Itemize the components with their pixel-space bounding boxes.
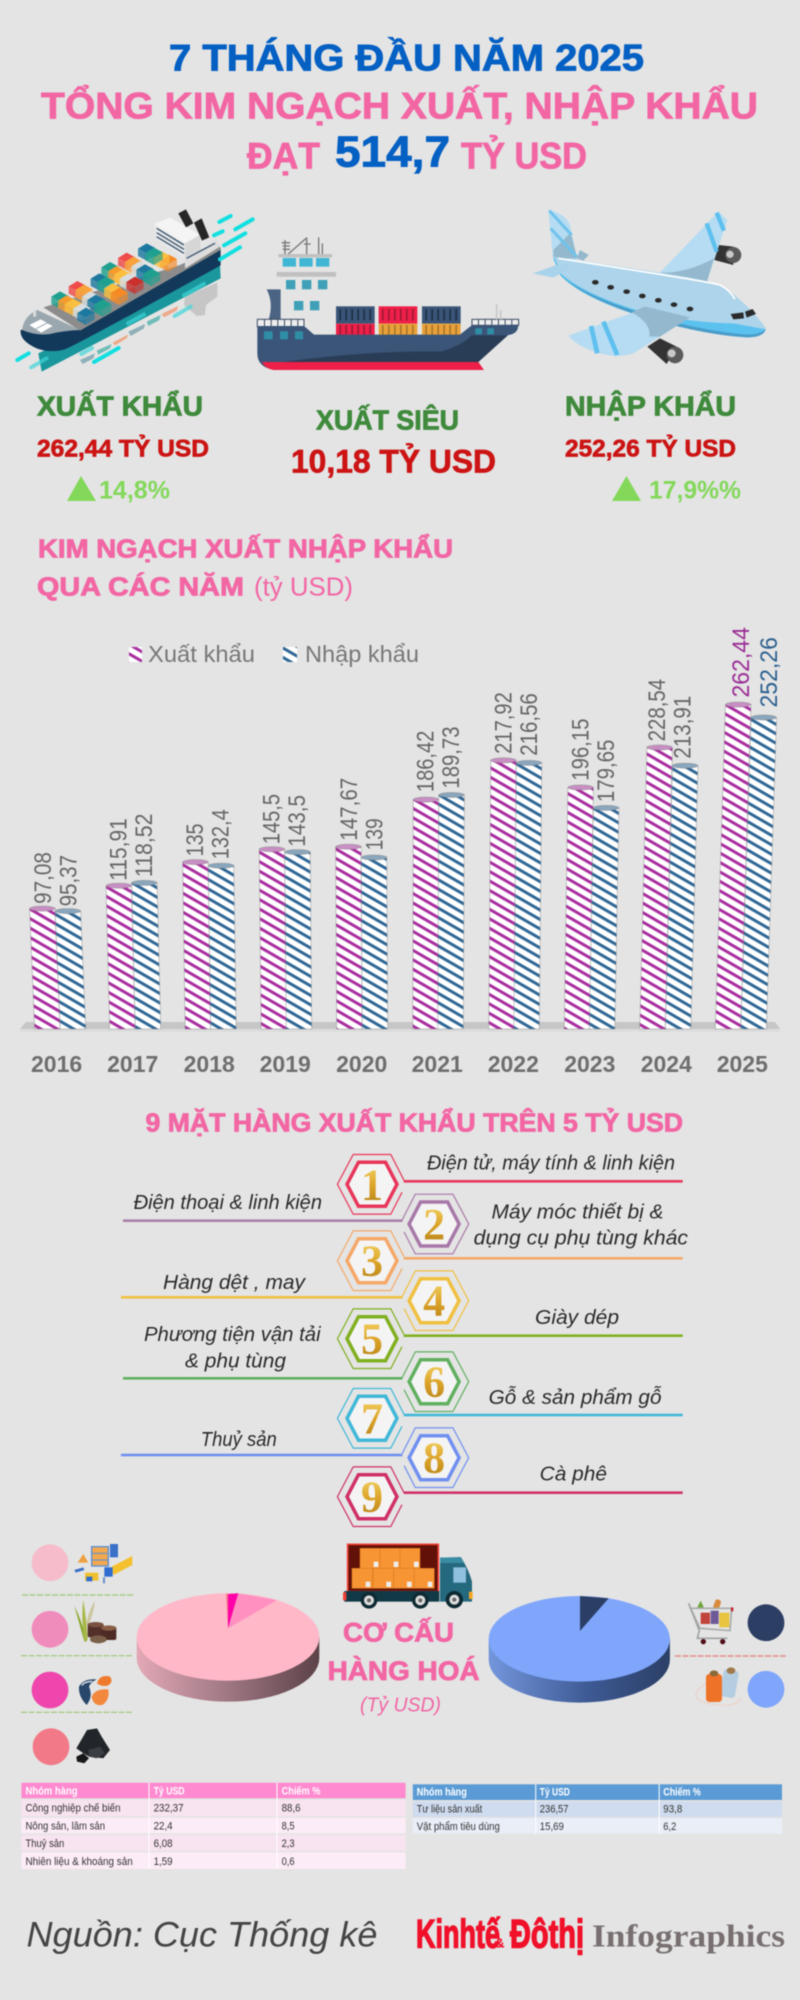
stat: nhập khẩu <box>565 391 741 504</box>
table: import groups <box>413 1784 782 1834</box>
bar value labels: 139 <box>362 818 389 850</box>
item 2: 2 <box>423 1200 445 1249</box>
icon: container ship isometric <box>17 209 253 372</box>
bar value labels: 217,92 <box>491 692 518 754</box>
logo: Kinh tế & Đô thị Infographics: & <box>495 1936 504 1951</box>
item 1 <box>337 1152 683 1214</box>
stat: nhập khẩu: NHẬP KHẨU <box>565 391 736 422</box>
bar value labels: 97,08 <box>30 852 57 904</box>
item 5 <box>337 1307 683 1368</box>
bars 2025 <box>715 702 776 1029</box>
stat: xuất khẩu: 262,44 TỶ USD <box>37 434 209 463</box>
pie chart: export structure <box>137 1593 319 1702</box>
bar value labels: 196,15 <box>567 719 594 781</box>
heading: kim ngạch qua các năm: QUA CÁC NĂM <box>37 572 244 602</box>
table: import groups: Tỷ USD <box>540 1787 570 1799</box>
bar value labels: 186,42 <box>413 731 440 792</box>
bars 2017 <box>106 880 161 1029</box>
item 5: Giày dép <box>535 1307 619 1329</box>
bars 2018 <box>183 860 236 1029</box>
heading: kim ngạch qua các năm: KIM NGẠCH XUẤT NHẬP KHẨU <box>38 534 453 564</box>
stat: xuất siêu: XUẤT SIÊU <box>316 404 459 435</box>
bars 2016 <box>30 906 86 1029</box>
logo: Kinh tế & Đô thị Infographics: Kinhtế <box>416 1913 501 1957</box>
table: import groups: Chiếm % <box>663 1787 701 1799</box>
heading: cơ cấu hàng hoá <box>328 1617 480 1717</box>
year axis labels: 2016 <box>31 1051 82 1077</box>
year axis labels <box>31 1051 768 1077</box>
year axis labels: 2025 <box>717 1051 768 1077</box>
title: ĐẠT <box>247 135 320 176</box>
bars 2024 <box>640 745 698 1029</box>
bar value labels: 135 <box>182 824 209 856</box>
title <box>41 38 758 177</box>
bars 2022 <box>489 758 542 1029</box>
bar value labels <box>30 627 783 906</box>
bar value labels: 216,56 <box>516 693 543 756</box>
logo: Kinh tế & Đô thị Infographics: Infographics <box>592 1918 785 1954</box>
table: export groups: 1,59 <box>154 1856 173 1868</box>
item 6: 6 <box>423 1358 445 1407</box>
item 8: Thuỷ sản <box>201 1429 277 1451</box>
table: import groups: 236,57 <box>540 1804 568 1816</box>
item 9 <box>337 1464 683 1526</box>
bars 2021 <box>413 792 464 1029</box>
item 6: Phương tiện vận tải <box>144 1324 321 1346</box>
bar value labels: 147,67 <box>336 778 363 841</box>
year axis labels: 2018 <box>184 1051 235 1077</box>
year axis labels: 2019 <box>260 1051 311 1077</box>
icon: cargo ship side view <box>257 237 519 370</box>
year axis labels: 2017 <box>107 1051 158 1077</box>
item 6: & phụ tùng <box>185 1350 286 1372</box>
table: export groups: Tỷ USD <box>154 1785 185 1797</box>
bar value labels: 179,65 <box>593 740 620 802</box>
bar value labels: 262,44 <box>728 627 755 698</box>
stat: xuất siêu: 10,18 TỶ USD <box>291 443 496 479</box>
heading: kim ngạch qua các năm: (tỷ USD) <box>254 572 353 602</box>
icon: shopping cart <box>689 1599 733 1644</box>
item 2 <box>123 1192 688 1254</box>
item 7: 7 <box>361 1394 383 1443</box>
heading: cơ cấu hàng hoá: HÀNG HOÁ <box>328 1655 480 1686</box>
item 6 <box>123 1324 469 1411</box>
title: 514,7 <box>335 128 450 177</box>
bar value labels: 213,91 <box>669 696 696 759</box>
table: export groups: Công nghiệp chế biến <box>26 1803 120 1815</box>
item 4: 4 <box>423 1277 445 1326</box>
source credit: Nguồn: Cục Thống kê <box>26 1916 378 1955</box>
bar value labels: 95,37 <box>56 855 82 906</box>
item 3: 3 <box>361 1237 383 1286</box>
table: export groups: Nhiên liệu & khoáng sản <box>26 1856 133 1868</box>
chart legend: Xuất khẩu <box>148 641 255 667</box>
table: import groups: 15,69 <box>540 1821 564 1833</box>
stat: xuất khẩu <box>37 391 209 504</box>
item 2: Điện thoại & linh kiện <box>134 1192 322 1214</box>
table: export groups: 0,6 <box>282 1856 295 1868</box>
table: import groups: Vật phẩm tiêu dùng <box>417 1821 500 1833</box>
bar value labels: 115,91 <box>106 818 132 881</box>
icon: coal <box>76 1728 110 1763</box>
item 4: Hàng dệt , may <box>163 1272 306 1294</box>
bar value labels: 145,5 <box>259 794 286 844</box>
heading: 9 mặt hàng: 9 MẶT HÀNG XUẤT KHẨU TRÊN 5 TỶ USD <box>146 1108 683 1138</box>
chart legend <box>129 641 419 667</box>
bars 2020 <box>336 844 388 1029</box>
year axis labels: 2021 <box>412 1051 463 1077</box>
table: export groups: 22,4 <box>154 1820 173 1832</box>
icon: airplane <box>533 210 766 364</box>
item 9: 9 <box>361 1473 383 1522</box>
heading: cơ cấu hàng hoá: (Tỷ USD) <box>360 1695 441 1717</box>
item 4 <box>121 1271 469 1330</box>
year axis labels: 2024 <box>641 1051 692 1077</box>
item 3 <box>337 1231 683 1290</box>
year axis labels: 2022 <box>488 1051 539 1077</box>
table: export groups: Nông sản, lâm sản <box>26 1820 105 1832</box>
table: export groups: 88,6 <box>282 1803 301 1815</box>
bar value labels: 118,52 <box>131 813 158 877</box>
bar value labels: 143,5 <box>284 795 311 847</box>
icon: rice and timber <box>74 1600 116 1643</box>
pie chart: import structure <box>489 1596 670 1703</box>
icon: factory and logistics <box>74 1544 132 1583</box>
table: import groups: Nhóm hàng <box>417 1787 467 1799</box>
logo: Kinh tế & Đô thị Infographics <box>416 1913 785 1957</box>
bar chart <box>20 627 783 1077</box>
table: export groups: Chiếm % <box>282 1785 321 1797</box>
icon: delivery truck <box>343 1544 473 1609</box>
item 2: dụng cụ phụ tùng khác <box>474 1227 688 1249</box>
title: TỔNG KIM NGẠCH XUẤT, NHẬP KHẨU <box>41 83 758 126</box>
heading: cơ cấu hàng hoá: CƠ CẤU <box>343 1617 454 1648</box>
item 1: Điện tử, máy tính & linh kiện <box>427 1152 675 1174</box>
table: import groups: 93,8 <box>663 1804 682 1816</box>
item 5: 5 <box>361 1315 383 1364</box>
item 1: 1 <box>361 1160 383 1209</box>
table: export groups: 8,5 <box>282 1820 295 1832</box>
bar value labels: 228,54 <box>644 679 671 741</box>
bar value labels: 252,26 <box>756 637 783 708</box>
bar value labels: 132,4 <box>208 809 235 859</box>
table: export groups: 232,37 <box>154 1803 184 1815</box>
table: export groups: 6,08 <box>154 1838 173 1850</box>
year axis labels: 2020 <box>336 1051 387 1077</box>
item 8: 8 <box>423 1434 445 1483</box>
table: export groups <box>21 1783 406 1869</box>
bar value labels: 189,73 <box>438 726 465 789</box>
table: import groups: 6,2 <box>663 1821 676 1833</box>
table: import groups: Tư liệu sản xuất <box>417 1804 482 1816</box>
year axis labels: 2023 <box>564 1051 615 1077</box>
title: TỶ USD <box>461 135 587 176</box>
stat: xuất khẩu: 14,8% <box>99 476 170 504</box>
table: export groups: Thuỷ sản <box>26 1838 64 1850</box>
logo: Kinh tế & Đô thị Infographics: Đôthị <box>510 1913 584 1957</box>
item 9: Cà phê <box>540 1464 607 1486</box>
stat: nhập khẩu: 17,9%% <box>649 476 741 504</box>
item 7 <box>337 1386 683 1448</box>
icon: thread spools <box>696 1667 741 1705</box>
legend left: export groups <box>21 1544 133 1765</box>
item 8 <box>121 1428 469 1487</box>
stat: xuất khẩu: XUẤT KHẨU <box>37 391 203 422</box>
heading: kim ngạch qua các năm <box>37 534 453 602</box>
bars 2019 <box>259 847 312 1029</box>
bars 2023 <box>564 785 619 1029</box>
item 7: Gỗ & sản phẩm gỗ <box>489 1386 662 1409</box>
stat: nhập khẩu: 252,26 TỶ USD <box>565 434 736 463</box>
stat: xuất siêu <box>291 404 496 479</box>
legend right: import groups <box>675 1599 786 1708</box>
table: export groups: Nhóm hàng <box>26 1785 78 1797</box>
title: 7 THÁNG ĐẦU NĂM 2025 <box>169 38 644 79</box>
icon: fish and shrimp <box>79 1676 111 1705</box>
item 2: Máy móc thiết bị & <box>492 1201 664 1223</box>
ranked export items <box>121 1152 688 1526</box>
chart legend: Nhập khẩu <box>305 641 419 667</box>
table: export groups: 2,3 <box>282 1838 295 1850</box>
